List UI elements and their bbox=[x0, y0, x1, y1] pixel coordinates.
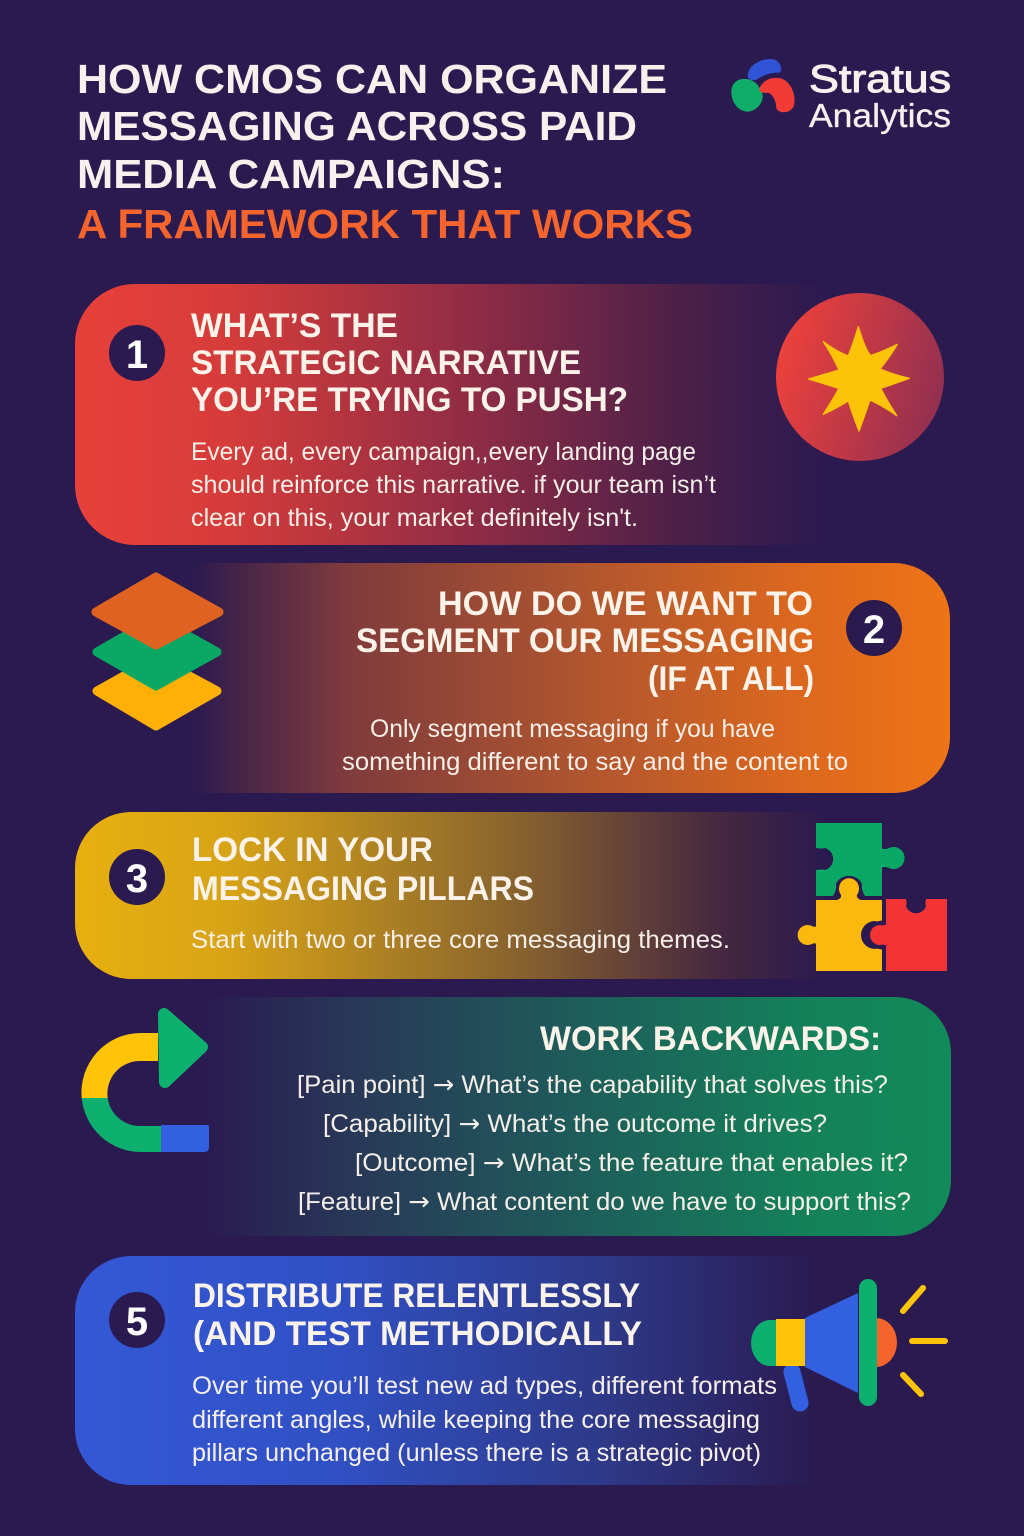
green piece bbox=[816, 823, 905, 896]
number badge 5 bbox=[109, 1292, 165, 1348]
body text bbox=[191, 438, 716, 532]
heading: YOU’RE TRYING TO PUSH? bbox=[191, 381, 628, 419]
heading: (IF AT ALL) bbox=[648, 660, 814, 698]
icon: stacked layers bbox=[96, 577, 219, 726]
body text: [Pain point] → What’s the capability that solves this? bbox=[297, 1070, 888, 1099]
icon: star in circle bbox=[776, 293, 944, 461]
title bbox=[77, 56, 693, 247]
heading: SEGMENT OUR MESSAGING bbox=[356, 622, 814, 660]
body text: pillars unchanged (unless there is a strategic pivot) bbox=[192, 1439, 761, 1467]
number badge 1: 1 bbox=[126, 333, 148, 377]
panel 1: strategic narrative bbox=[75, 284, 944, 545]
heading: WHAT’S THE bbox=[191, 307, 398, 345]
body text: Every ad, every campaign,,every landing page bbox=[191, 438, 696, 466]
panel 2: segment messaging bbox=[96, 563, 950, 793]
panel 5: distribute relentlessly bbox=[75, 1256, 945, 1485]
panel background bbox=[75, 812, 830, 979]
panel 4: work backwards bbox=[81, 997, 951, 1236]
body text: Over time you’ll test new ad types, different formats bbox=[192, 1372, 777, 1400]
number badge 2: 2 bbox=[863, 608, 885, 652]
heading bbox=[191, 307, 628, 419]
heading bbox=[356, 585, 814, 698]
heading: STRATEGIC NARRATIVE bbox=[191, 344, 581, 382]
body text bbox=[192, 1372, 777, 1467]
panel 3: messaging pillars bbox=[75, 812, 947, 979]
heading: WORK BACKWARDS: bbox=[540, 1020, 881, 1058]
icon: megaphone bbox=[751, 1279, 945, 1406]
body text: [Capability] → What’s the outcome it drives? bbox=[323, 1109, 827, 1138]
body text bbox=[342, 715, 848, 776]
heading: MESSAGING PILLARS bbox=[192, 870, 534, 908]
heading: HOW DO WE WANT TO bbox=[438, 585, 813, 623]
body text: clear on this, your market definitely isn't. bbox=[191, 504, 638, 532]
logo wordmark bbox=[809, 58, 951, 134]
heading: (AND TEST METHODICALLY bbox=[193, 1315, 642, 1353]
body text: Start with two or three core messaging themes. bbox=[191, 926, 730, 954]
heading: DISTRIBUTE RELENTLESSLY bbox=[193, 1277, 640, 1315]
body text: should reinforce this narrative. if your team isn’t bbox=[191, 471, 716, 499]
icon: u-turn arrow bbox=[81, 1014, 209, 1152]
body text: Only segment messaging if you have bbox=[370, 715, 775, 743]
number badge 3: 3 bbox=[126, 857, 148, 901]
heading bbox=[193, 1277, 642, 1353]
number badge 2 bbox=[846, 600, 902, 656]
yellow piece bbox=[798, 878, 883, 971]
red piece bbox=[870, 899, 947, 971]
number badge 5: 5 bbox=[126, 1300, 148, 1344]
body text bbox=[297, 1070, 911, 1216]
title: A FRAMEWORK THAT WORKS bbox=[77, 201, 693, 247]
logo: Stratus Analytics bbox=[731, 58, 951, 134]
logo wordmark: Stratus bbox=[809, 58, 951, 101]
panel background bbox=[75, 1256, 820, 1485]
title: HOW CMOS CAN ORGANIZE bbox=[77, 56, 667, 102]
number badge 1 bbox=[109, 325, 165, 381]
body text: something different to say and the content to bbox=[342, 748, 848, 776]
body text: different angles, while keeping the core messaging bbox=[192, 1406, 760, 1434]
icon: puzzle pieces bbox=[798, 823, 947, 971]
body text: [Outcome] → What’s the feature that enables it? bbox=[355, 1148, 908, 1177]
icon: logo blobs bbox=[731, 59, 795, 112]
number badge 3 bbox=[109, 849, 165, 905]
heading bbox=[192, 831, 534, 908]
logo wordmark: Analytics bbox=[809, 97, 951, 134]
heading: LOCK IN YOUR bbox=[192, 831, 433, 869]
body text: [Feature] → What content do we have to support this? bbox=[298, 1187, 911, 1216]
title: MEDIA CAMPAIGNS: bbox=[77, 151, 505, 197]
panel background bbox=[200, 997, 951, 1236]
panel background bbox=[190, 563, 950, 793]
title: MESSAGING ACROSS PAID bbox=[77, 103, 637, 149]
panel background bbox=[75, 284, 830, 545]
